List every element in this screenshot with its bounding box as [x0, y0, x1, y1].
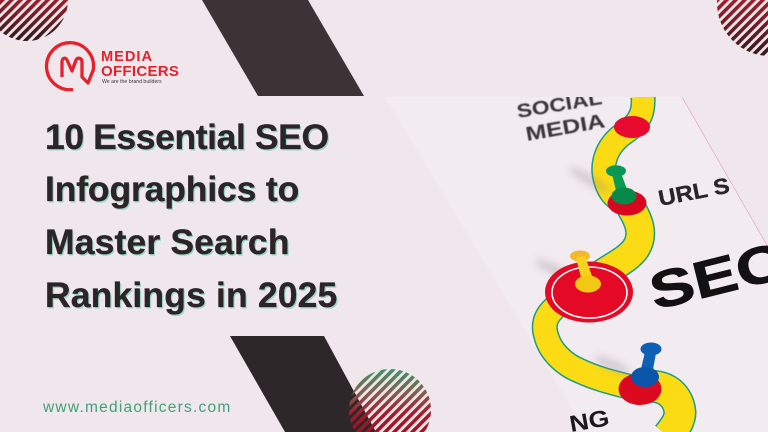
title: Rankings in 2025 [45, 274, 337, 314]
striped circle: bottom [349, 369, 431, 432]
website url: www.mediaofficers.com [43, 399, 232, 416]
title: Infographics to [45, 168, 299, 208]
title [45, 117, 338, 316]
pin: green [606, 165, 636, 204]
logo text: OFFICERS [101, 62, 179, 80]
photo label: social media: SOCIAL [515, 88, 604, 123]
red marker: URL [608, 190, 646, 216]
dark band: top [202, 0, 364, 96]
title: Master Search [45, 222, 290, 262]
red marker: SEO [545, 262, 633, 322]
paper sheet [385, 97, 768, 432]
pin shadows [533, 164, 632, 378]
pin: blue [631, 342, 662, 387]
photo label: URL S: URL S [656, 173, 732, 211]
pin: yellow [570, 250, 601, 292]
logo text: MEDIA [101, 49, 153, 65]
photo: SEO roadmap with push pins [517, 97, 768, 432]
logo mark [47, 43, 94, 90]
dark band: bottom [230, 336, 376, 432]
yellow road [545, 97, 680, 432]
photo label: SEO: SEO [644, 231, 768, 322]
photo label: social media [516, 97, 606, 142]
red marker: bottom [618, 373, 662, 405]
striped circle: top right [717, 0, 768, 56]
red marker: social media [614, 116, 650, 138]
photo label: social media: MEDIA [524, 110, 607, 146]
striped circle: top left [0, 0, 68, 41]
title: 10 Essential SEO [45, 117, 329, 157]
logo text [101, 49, 179, 85]
logo text: We are the brand builders [102, 79, 162, 85]
